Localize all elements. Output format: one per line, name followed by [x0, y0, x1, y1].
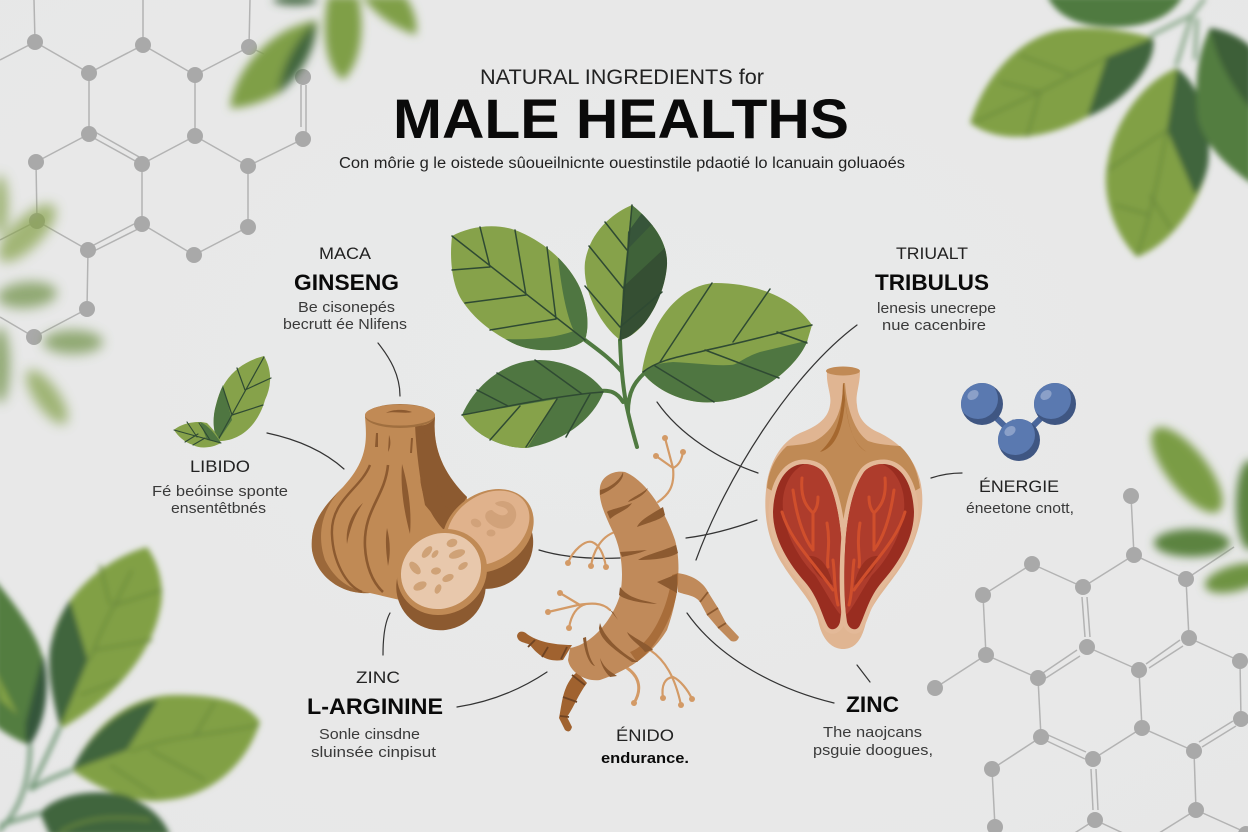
- molecule network: top left: [0, 0, 311, 345]
- fine rootlets: [545, 435, 695, 708]
- label: Zinc L-Arginine: sluinsée cinpisut: [311, 744, 437, 761]
- right chamber: [844, 464, 914, 629]
- label: Zinc L-Arginine: ZINC: [356, 668, 400, 687]
- molecule network: bottom right: [927, 488, 1248, 832]
- label: Libido: ensentêtbnés: [171, 500, 266, 517]
- label: Maca Ginseng: GINSENG: [294, 270, 399, 295]
- label: Zinc: ZINC: [846, 692, 899, 717]
- label: Énido endurance: ÉNIDO: [616, 726, 674, 745]
- root top disc: [365, 404, 435, 428]
- label: Zinc: The naojcans: [823, 724, 922, 741]
- label: Tribulus: [875, 244, 996, 334]
- stem: [585, 340, 655, 447]
- right arm: [677, 573, 739, 642]
- label: Tribulus: TRIUALT: [896, 244, 968, 263]
- blurred leaves: right edge: [1139, 417, 1248, 599]
- leaf: right: [640, 283, 812, 410]
- label: Zinc: psguie doogues,: [813, 742, 933, 759]
- label: Énido endurance: endurance.: [601, 750, 689, 767]
- label: Énido endurance: [601, 726, 689, 767]
- leaf: top: [585, 200, 672, 345]
- label: Zinc L-Arginine: Sonle cinsdne: [319, 726, 420, 743]
- connector lines: [267, 325, 962, 707]
- ginseng root: [517, 435, 739, 731]
- label: Tribulus: lenesis unecrepe: [877, 300, 996, 317]
- leaf: upper left: [451, 226, 588, 350]
- left chamber: [773, 464, 843, 629]
- blurred leaves: top centre: [230, 0, 417, 108]
- label: Zinc: [813, 692, 933, 759]
- blurred leaves: left edge: [0, 175, 103, 430]
- label: Zinc L-Arginine: [307, 668, 443, 761]
- tan inner: [767, 383, 920, 532]
- eyebrow heading: NATURAL INGREDIENTS for: [480, 66, 764, 89]
- lower left arm: [517, 632, 572, 660]
- label: Tribulus: TRIBULUS: [875, 270, 989, 295]
- label: Libido: LIBIDO: [190, 457, 250, 476]
- main heading: MALE HEALTHS: [393, 87, 849, 150]
- label: Maca Ginseng: MACA: [319, 244, 372, 263]
- label: Énergie: [966, 477, 1074, 517]
- tribulus organ cross-section: [765, 366, 922, 649]
- label: Énergie: ÉNERGIE: [979, 477, 1059, 496]
- label: Libido: Fé beóinse sponte: [152, 483, 288, 500]
- molecule icon: [958, 379, 1076, 461]
- label: Maca Ginseng: Be cisonepés: [298, 299, 395, 316]
- blurred leaves: top right: [970, 0, 1248, 257]
- subtitle: Con môrie g le oistede sûoueilnicnte ouestinstile pdaotié lo lcanuain goluaoés: [339, 155, 905, 172]
- blurred leaves: bottom left: [0, 547, 260, 832]
- small leaf icon: [174, 356, 271, 447]
- root body: [312, 417, 470, 600]
- label: Tribulus: nue cacenbire: [882, 317, 986, 334]
- central plant sprig: [451, 200, 812, 450]
- front slice: [380, 513, 503, 647]
- maca root with slices: [312, 404, 552, 647]
- leaf: lower left: [462, 360, 604, 450]
- title: [339, 66, 905, 172]
- outer shell: [765, 372, 922, 649]
- label: Énergie: éneetone cnott,: [966, 500, 1074, 517]
- label: Maca Ginseng: [283, 244, 407, 333]
- label: Maca Ginseng: becrutt ée Nlifens: [283, 316, 407, 333]
- back slice: [424, 472, 552, 607]
- lower arm: [559, 672, 587, 731]
- main root body: [568, 472, 678, 680]
- label: Libido: [152, 457, 288, 517]
- label: Zinc L-Arginine: L-ARGININE: [307, 694, 443, 719]
